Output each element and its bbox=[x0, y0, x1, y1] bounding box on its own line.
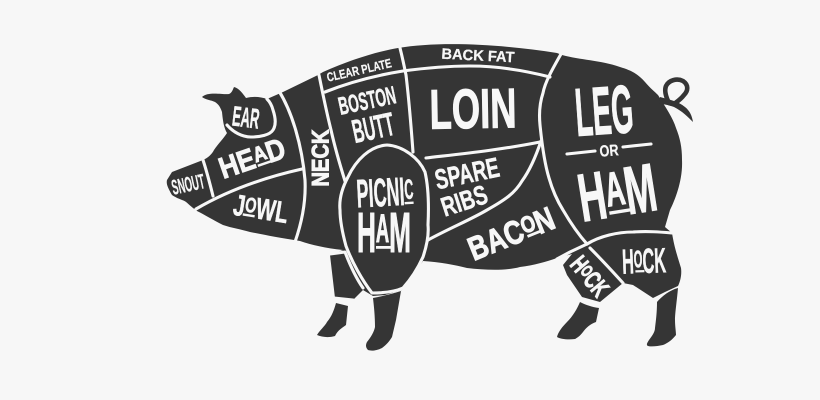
label: hock left: CK bbox=[577, 266, 614, 302]
label: picnic ham: A bbox=[376, 207, 389, 251]
label: spare ribs: SPARE bbox=[432, 152, 502, 195]
label: hock left: H bbox=[564, 251, 597, 283]
label: hock right: H bbox=[621, 242, 648, 282]
label: head bbox=[215, 132, 290, 186]
label: boston butt: BUTT bbox=[349, 105, 397, 150]
label: leg or ham: LEG bbox=[573, 71, 636, 151]
pig butcher cuts diagram: EAR bbox=[231, 100, 261, 135]
label: hock left bbox=[564, 251, 614, 302]
label: picnic ham bbox=[355, 170, 415, 265]
tail bbox=[659, 97, 693, 122]
label: leg or ham: M bbox=[619, 149, 662, 229]
label: leg or ham: A bbox=[601, 162, 628, 218]
pig butcher cuts diagram: SNOUT bbox=[170, 170, 207, 200]
label: spare ribs: RIBS bbox=[437, 179, 491, 222]
rear right lower leg bbox=[647, 288, 678, 346]
label: neck: NECK bbox=[308, 129, 334, 186]
label: hock right: O bbox=[633, 246, 643, 273]
pig silhouette bbox=[167, 44, 693, 351]
label: head: HE bbox=[215, 141, 265, 186]
label: clear plate: CLEAR PLATE bbox=[325, 56, 393, 85]
front right lower leg bbox=[366, 291, 401, 351]
label: leg or ham: OR bbox=[599, 142, 620, 161]
label: back fat: BACK FAT bbox=[441, 46, 515, 66]
label: head: A bbox=[250, 141, 270, 167]
label: bacon: O bbox=[516, 209, 539, 239]
label: bacon: N bbox=[528, 199, 560, 241]
label: picnic ham: PICNI bbox=[355, 167, 464, 216]
label: head: D bbox=[261, 132, 290, 170]
label: bacon: BAC bbox=[463, 206, 543, 267]
label: boston butt: BOSTON bbox=[336, 81, 398, 121]
label: picnic ham: C bbox=[403, 174, 414, 205]
pig butcher cuts diagram: CK bbox=[642, 241, 667, 281]
label: hock right bbox=[621, 241, 667, 282]
label: leg or ham: H bbox=[573, 154, 633, 237]
label: leg or ham bbox=[573, 71, 662, 237]
label: jowl: WL bbox=[254, 192, 291, 230]
label: picnic ham: H bbox=[357, 201, 398, 265]
label: boston butt bbox=[336, 81, 398, 150]
label: hock left: O bbox=[577, 262, 597, 281]
label: jowl: O bbox=[243, 194, 258, 218]
cut lines bbox=[196, 48, 672, 300]
label: jowl: J bbox=[231, 189, 253, 224]
label: picnic ham: M bbox=[389, 201, 411, 265]
label: jowl bbox=[231, 189, 291, 230]
label: loin: LOIN bbox=[429, 76, 517, 141]
front left lower leg bbox=[317, 303, 348, 337]
rear left lower leg bbox=[557, 302, 599, 339]
label: spare ribs bbox=[432, 152, 502, 222]
